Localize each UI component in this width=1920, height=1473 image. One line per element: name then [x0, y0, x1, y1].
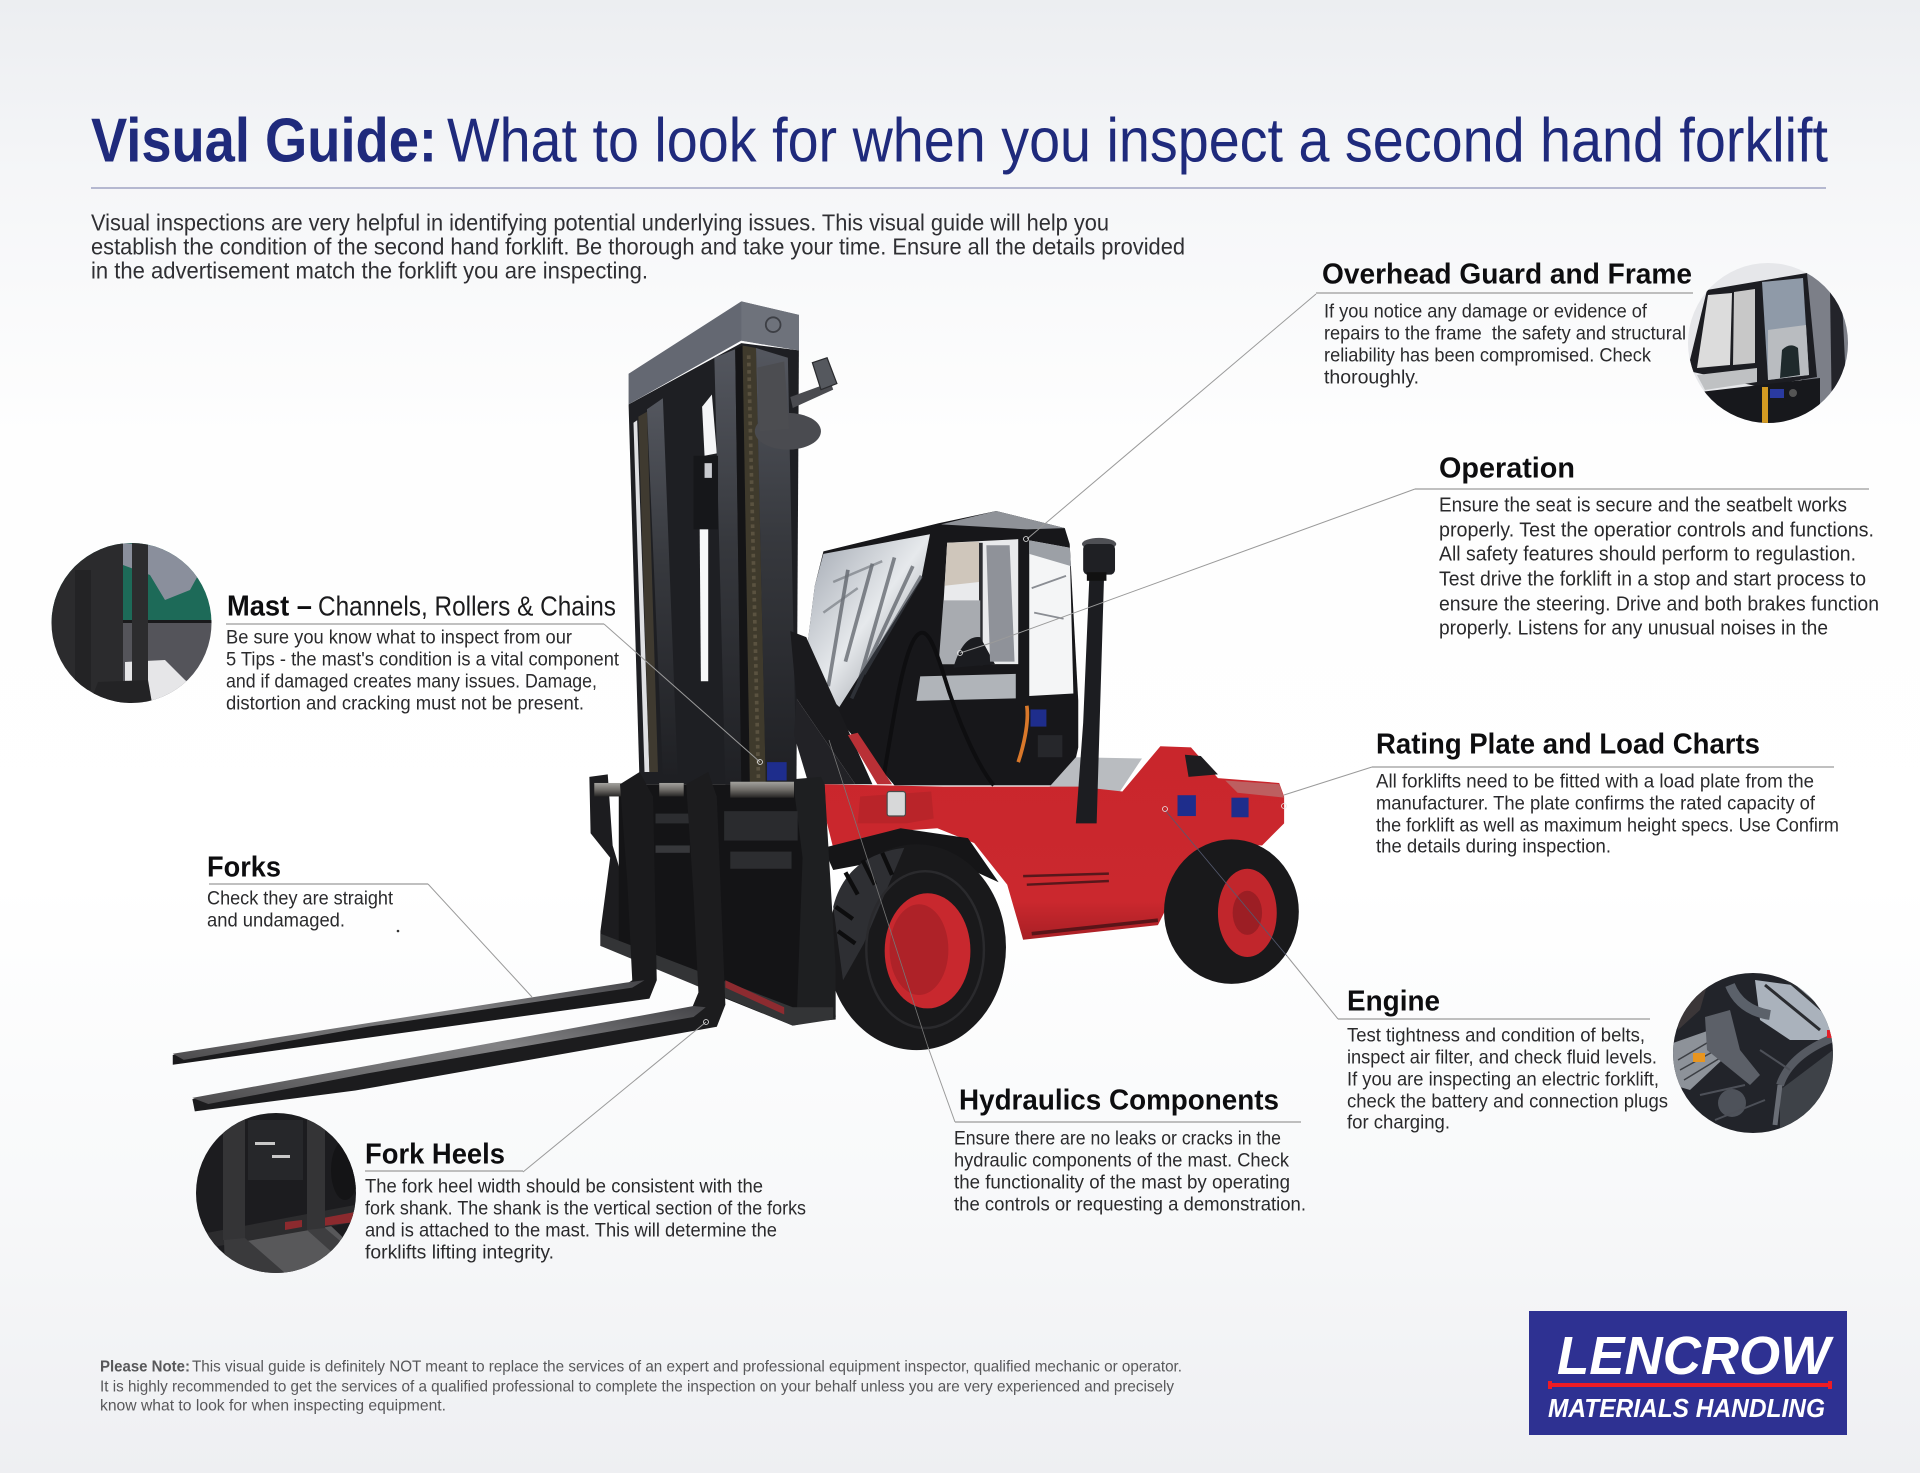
intro text: establish the condition of the second hand forklift. Be thorough and take your time. Ensure all the details provided	[91, 234, 1185, 260]
text: rating plate: All forklifts need to be fitted with a load plate from the	[1376, 770, 1814, 792]
red body	[767, 746, 1284, 940]
logo: Lencrow Materials Handling: MATERIALS HANDLING	[1548, 1393, 1825, 1423]
cab	[790, 511, 1078, 785]
photo: cab	[1688, 263, 1848, 423]
disclaimer note: know what to look for when inspecting equipment.	[100, 1398, 446, 1414]
text: overhead guard: reliability has been compromised. Check	[1324, 344, 1651, 366]
text: engine: Test tightness and condition of belts,	[1347, 1024, 1645, 1046]
text: overhead guard: repairs to the frame the safety and structural	[1324, 322, 1686, 344]
text: operation: Ensure the seat is secure and the seatbelt works	[1439, 494, 1847, 516]
text: operation: All safety features should perform to regulastion.	[1439, 544, 1856, 566]
panel: mast	[51, 543, 620, 714]
disclaimer note: Please Note:	[100, 1358, 190, 1376]
exhaust	[1076, 538, 1116, 823]
text: rating plate: the forklift as well as maximum height specs. Use Confirm	[1376, 814, 1839, 836]
photo: fork heels	[196, 1113, 359, 1273]
door window	[940, 539, 1018, 664]
logo: Lencrow Materials Handling	[1529, 1311, 1847, 1435]
heading: engine: Engine	[1347, 986, 1440, 1018]
rating plate stickers	[1178, 795, 1196, 816]
logo: Lencrow Materials Handling: LENCROW	[1557, 1326, 1834, 1386]
rear wheel	[1164, 839, 1299, 984]
windshield	[804, 534, 930, 707]
text: hydraulics: the controls or requesting a demonstration.	[954, 1194, 1306, 1216]
text: rating plate	[1376, 770, 1839, 858]
grab handle	[883, 633, 994, 785]
text: engine: inspect air filter, and check fluid levels.	[1347, 1046, 1657, 1068]
panel: hydraulics components	[954, 1084, 1306, 1216]
disclaimer note: It is highly recommended to get the services of a qualified professional to complete the inspection on your behalf unless you are very experienced and precisely	[100, 1378, 1174, 1396]
text: fork heels: forklifts lifting integrity.	[365, 1242, 554, 1264]
intro text: Visual inspections are very helpful in identifying potential underlying issues. This visual guide will help you	[91, 210, 1109, 236]
text: engine: for charging.	[1347, 1112, 1450, 1134]
carriage	[589, 774, 836, 1026]
panel: rating plate and load charts	[1372, 728, 1839, 858]
disclaimer note	[100, 1358, 1182, 1414]
text: operation: properly. Listens for any unusual noises in the	[1439, 618, 1828, 640]
text: fork heels: fork shank. The shank is the vertical section of the forks	[365, 1198, 806, 1220]
text: hydraulics: Ensure there are no leaks or cracks in the	[954, 1128, 1281, 1150]
panel: forks	[207, 852, 428, 932]
text: forks	[207, 888, 394, 932]
panel: fork heels	[196, 1113, 806, 1273]
cab sticker	[1030, 709, 1046, 727]
panel: engine	[1338, 973, 1833, 1134]
text: fork heels: and is attached to the mast. This will determine the	[365, 1220, 777, 1242]
heading: hydraulics: Hydraulics Components	[959, 1084, 1279, 1116]
text: forks: and undamaged.	[207, 910, 345, 932]
heading: fork heels: Fork Heels	[365, 1138, 505, 1170]
text: fork heels	[365, 1176, 806, 1264]
text: mast: distortion and cracking must not be present.	[226, 692, 584, 714]
text: engine: check the battery and connection plugs	[1347, 1090, 1668, 1112]
text: mast	[226, 626, 620, 714]
photo: engine bay	[1673, 973, 1833, 1133]
panel: operation	[1415, 452, 1879, 640]
heading: operation: Operation	[1439, 452, 1575, 484]
text: operation: ensure the steering. Drive and both brakes function	[1439, 594, 1879, 616]
headlight	[887, 792, 905, 816]
leader lines	[397, 294, 1415, 1172]
right fork	[192, 772, 725, 1111]
panel: overhead guard and frame	[1316, 258, 1848, 423]
text: mast: 5 Tips - the mast's condition is a vital component	[226, 648, 620, 670]
text: hydraulics	[954, 1128, 1306, 1216]
text: rating plate: manufacturer. The plate confirms the rated capacity of	[1376, 792, 1816, 814]
text: engine: If you are inspecting an electric forklift,	[1347, 1068, 1659, 1090]
intro text: in the advertisement match the forklift you are inspecting.	[91, 258, 648, 284]
heading: mast: Channels, Rollers & Chains	[318, 590, 616, 622]
text: hydraulics: the functionality of the mast by operating	[954, 1172, 1290, 1194]
text: fork heels: The fork heel width should be consistent with the	[365, 1176, 763, 1198]
heading: rating plate: Rating Plate and Load Charts	[1376, 728, 1760, 760]
text: mast: Be sure you know what to inspect from our	[226, 626, 572, 648]
text: operation	[1439, 494, 1879, 640]
text: operation: Test drive the forklift in a stop and start process to	[1439, 568, 1866, 590]
forklift illustration	[173, 301, 1299, 1111]
heading: forks: Forks	[207, 852, 281, 884]
intro text	[91, 210, 1185, 284]
text: hydraulics: hydraulic components of the mast. Check	[954, 1150, 1289, 1172]
photo: mast chain	[51, 543, 212, 703]
text: rating plate: the details during inspection.	[1376, 836, 1611, 858]
front wheel	[827, 844, 1006, 1050]
text: forks: Check they are straight	[207, 888, 394, 910]
heading: mast	[227, 590, 616, 622]
lower pane	[917, 674, 1016, 701]
text: operation: properly. Test the operatior controls and functions.	[1439, 520, 1874, 542]
text: engine	[1347, 1024, 1668, 1134]
text: mast: and if damaged creates many issues. Damage,	[226, 670, 597, 692]
mast	[629, 301, 837, 784]
disclaimer note: This visual guide is definitely NOT meant to replace the services of an expert and professional equipment inspector, qualified mechanic or operator.	[192, 1358, 1182, 1376]
text: overhead guard: If you notice any damage or evidence of	[1324, 300, 1648, 322]
title: Visual Guide:	[91, 106, 437, 176]
heading: overhead guard: Overhead Guard and Frame	[1322, 258, 1692, 290]
heading: mast: Mast –	[227, 590, 312, 622]
text: overhead guard	[1324, 300, 1686, 388]
side window	[1029, 540, 1073, 696]
hinge arm	[790, 631, 872, 784]
text: overhead guard: thoroughly.	[1324, 366, 1419, 388]
left fork	[173, 772, 657, 1065]
